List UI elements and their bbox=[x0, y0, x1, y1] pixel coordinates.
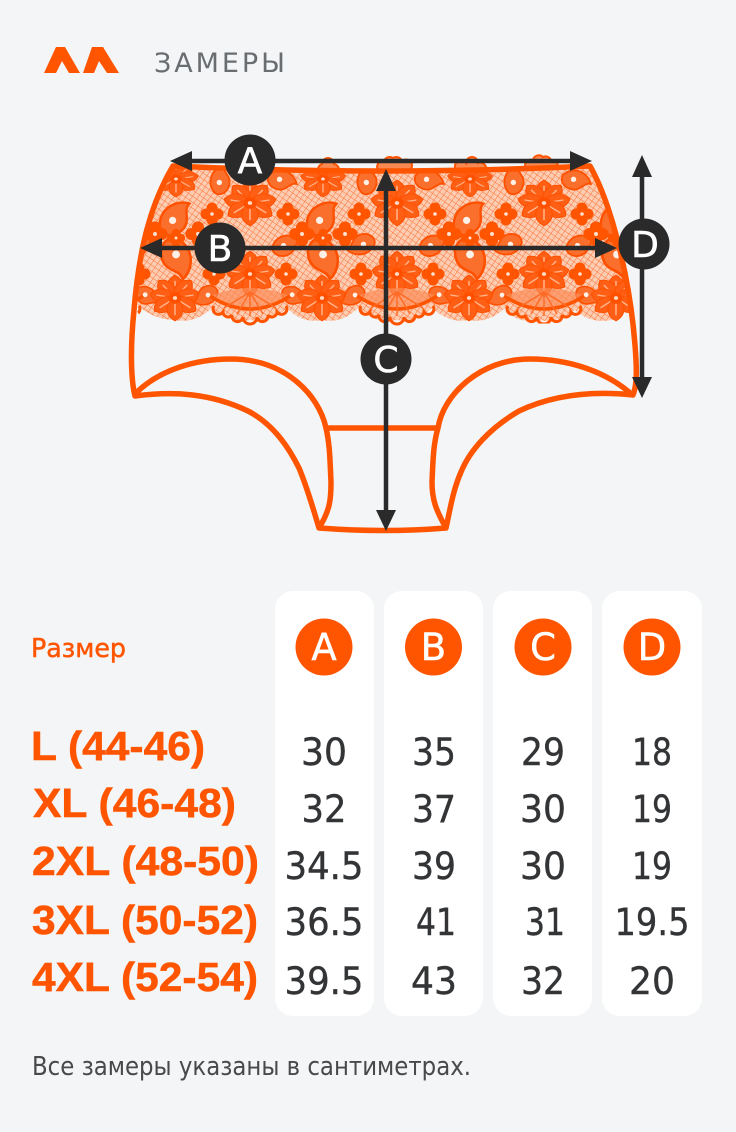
garment outline bbox=[131, 166, 636, 530]
marker A: A bbox=[238, 141, 263, 182]
lace waistband bbox=[137, 154, 629, 326]
garment diagram bbox=[128, 154, 640, 534]
logo bbox=[44, 47, 119, 73]
column A: 36.5 bbox=[284, 901, 364, 944]
marker B: B bbox=[208, 229, 232, 270]
marker A bbox=[224, 134, 276, 186]
column D: 19 bbox=[632, 845, 672, 888]
arrow C bbox=[376, 169, 396, 531]
top scallops bbox=[318, 155, 558, 170]
column A: 34.5 bbox=[284, 845, 364, 888]
column D: D bbox=[638, 626, 666, 669]
size labels: XL (46-48) bbox=[33, 780, 236, 826]
marker D: D bbox=[631, 225, 659, 266]
column B: 41 bbox=[416, 901, 456, 944]
column B: 43 bbox=[411, 960, 457, 1003]
column A: A bbox=[311, 626, 337, 669]
marker D bbox=[618, 218, 670, 270]
column C: 32 bbox=[521, 960, 565, 1003]
size labels: 4XL (52-54) bbox=[32, 954, 258, 1000]
arrow A bbox=[170, 151, 592, 171]
column A: 32 bbox=[302, 788, 346, 831]
column A: 39.5 bbox=[284, 960, 364, 1003]
marker C: C bbox=[373, 340, 399, 381]
arrow D bbox=[632, 155, 652, 398]
column B bbox=[384, 591, 483, 1016]
column C: 30 bbox=[520, 845, 566, 888]
column D: 19.5 bbox=[614, 901, 690, 944]
marker B bbox=[194, 222, 246, 274]
column A: 30 bbox=[301, 731, 347, 774]
column B: 39 bbox=[412, 845, 456, 888]
marker C bbox=[360, 334, 412, 384]
size labels bbox=[31, 723, 259, 1000]
column B: 37 bbox=[412, 788, 456, 831]
row header: size: Размер bbox=[31, 634, 126, 664]
column B: 35 bbox=[412, 731, 456, 774]
size labels: 2XL (48-50) bbox=[32, 838, 259, 884]
title: ЗАМЕРЫ bbox=[154, 48, 285, 79]
column B: B bbox=[421, 626, 446, 669]
column C: 29 bbox=[521, 731, 565, 774]
column D: 18 bbox=[632, 731, 672, 774]
footnote: Все замеры указаны в сантиметрах. bbox=[32, 1052, 471, 1082]
column D bbox=[602, 591, 702, 1016]
column A bbox=[275, 591, 374, 1016]
column D: 19 bbox=[632, 788, 672, 831]
column C bbox=[493, 591, 592, 1016]
column C: C bbox=[530, 626, 556, 669]
size table bbox=[31, 591, 702, 1016]
column C: 31 bbox=[525, 901, 565, 944]
size labels: 3XL (50-52) bbox=[32, 897, 258, 943]
column D: 20 bbox=[629, 960, 675, 1003]
arrow B bbox=[140, 238, 617, 258]
size labels: L (44-46) bbox=[31, 723, 205, 769]
column C: 30 bbox=[520, 788, 566, 831]
